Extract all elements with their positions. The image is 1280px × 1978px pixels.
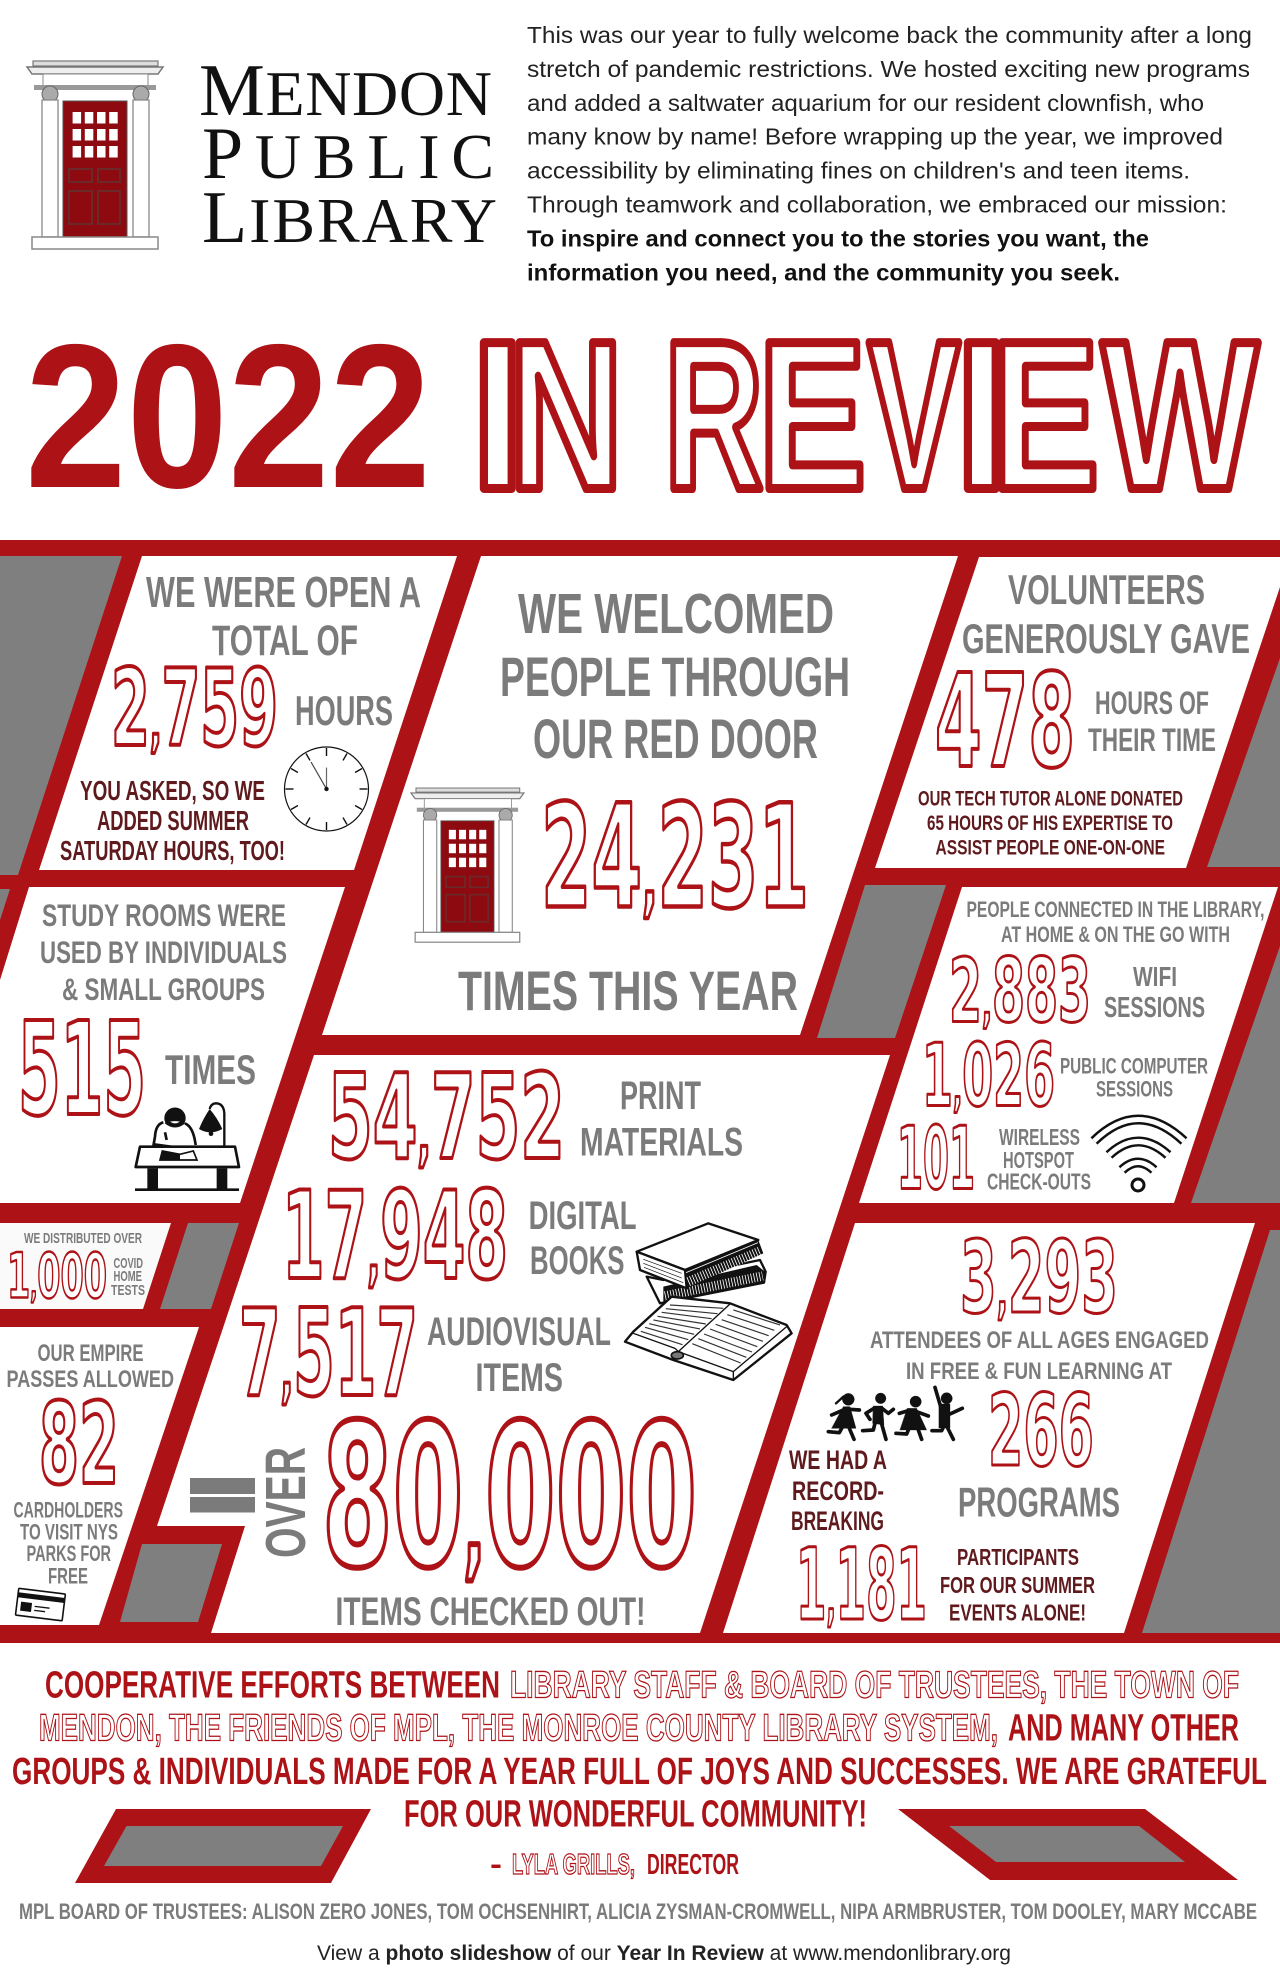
panel: connections: HOTSPOT xyxy=(1003,1147,1074,1173)
intro text block: Through teamwork and collaboration, we embraced our mission: xyxy=(527,192,1227,218)
panel: connections: SESSIONS xyxy=(1096,1076,1173,1102)
signature: LYLA GRILLS, xyxy=(512,1849,635,1881)
panel: study rooms: USED BY INDIVIDUALS xyxy=(40,934,287,970)
panel: connections: CHECK-OUTS xyxy=(987,1168,1091,1194)
panel: items checked out: 7,517 xyxy=(239,1285,418,1424)
intro text block xyxy=(527,22,1252,285)
panel: connections: WIFI xyxy=(1133,961,1177,992)
panel: items checked out: AUDIOVISUAL xyxy=(427,1310,611,1354)
logo wordmark: MENDON xyxy=(199,50,492,132)
intro text block: information you need, and the community you seek. xyxy=(527,259,1120,285)
icon: pass card xyxy=(15,1588,65,1621)
panel: study rooms: 515 xyxy=(18,995,146,1145)
intro text block: accessibility by eliminating fines on children's and teen items. xyxy=(527,158,1190,184)
panel: items checked out: ITEMS CHECKED OUT! xyxy=(336,1590,646,1634)
panel: empire passes xyxy=(0,1327,199,1625)
panel: volunteers: THEIR TIME xyxy=(1088,722,1216,758)
intro text block: and added a saltwater aquarium for our resident clownfish, who xyxy=(527,90,1204,116)
panel: red door visits: WE WELCOMED xyxy=(518,582,834,646)
title: IN REVIEW: R xyxy=(664,296,764,534)
panel: programs: WE HAD A xyxy=(789,1445,887,1475)
panel: connections: 2,883 xyxy=(949,940,1091,1042)
panel: connections: 1,026 xyxy=(922,1026,1055,1126)
panel: programs: RECORD- xyxy=(792,1476,884,1506)
panel: items checked out xyxy=(157,1048,890,1634)
closing statement: FOR OUR WONDERFUL COMMUNITY! xyxy=(404,1794,867,1836)
panel: study rooms: TIMES xyxy=(165,1046,256,1093)
panel: covid tests: COVID xyxy=(114,1255,143,1272)
panel: empire passes: FREE xyxy=(48,1564,88,1589)
panel: open hours xyxy=(39,556,457,870)
logo wordmark: LIBRARY xyxy=(202,177,497,259)
panel: covid tests: 1,000 xyxy=(7,1240,107,1312)
panel: empire passes: CARDHOLDERS xyxy=(14,1498,123,1523)
panel: empire passes: 82 xyxy=(39,1380,119,1510)
panel: open hours: TOTAL OF xyxy=(212,617,358,665)
panel: volunteers: ASSIST PEOPLE ONE-ON-ONE xyxy=(936,836,1165,860)
intro text block: many know by name! Before wrapping up the year, we improved xyxy=(527,124,1223,150)
panel: programs: 3,293 xyxy=(960,1219,1118,1336)
panel: items checked out: MATERIALS xyxy=(580,1120,743,1164)
title: 2022: 2022 xyxy=(25,302,431,531)
icon: red door xyxy=(411,788,524,942)
panel: covid tests: HOME xyxy=(114,1268,142,1285)
panel: open hours: WE WERE OPEN A xyxy=(146,569,421,617)
panel: connections: WIRELESS xyxy=(999,1124,1080,1150)
panel: items checked out: 17,948 xyxy=(282,1166,508,1307)
panel: connections: 101 xyxy=(897,1110,975,1210)
red grid background xyxy=(0,540,1280,1643)
signature: - xyxy=(490,1849,502,1881)
logo wordmark: PUBLIC xyxy=(202,113,494,195)
title: IN REVIEW: I xyxy=(471,296,525,534)
panel: open hours: HOURS xyxy=(295,687,393,734)
panel: study rooms: STUDY ROOMS WERE xyxy=(42,897,286,933)
panel: open hours: ADDED SUMMER xyxy=(97,805,249,836)
icon: equals sign xyxy=(190,1478,255,1512)
panel: open hours: 2,759 xyxy=(111,647,278,770)
panel: volunteers: 65 HOURS OF HIS EXPERTISE TO xyxy=(927,812,1173,835)
icon: wifi xyxy=(1094,1120,1184,1191)
panel: red door visits: OUR RED DOOR xyxy=(533,708,818,770)
title: IN REVIEW: E xyxy=(758,296,866,534)
footer link text: View a photo slideshow of our Year In Review at www.mendonlibrary.org xyxy=(317,1942,1011,1965)
intro text block: This was our year to fully welcome back the community after a long xyxy=(527,22,1252,48)
closing statement xyxy=(12,1665,1267,1836)
panel: programs: PARTICIPANTS xyxy=(957,1544,1079,1570)
panel: open hours: SATURDAY HOURS, TOO! xyxy=(60,835,285,866)
panel: connections xyxy=(859,887,1278,1210)
panel: programs: BREAKING xyxy=(791,1506,884,1536)
panel: connections: PUBLIC COMPUTER xyxy=(1060,1054,1208,1079)
panel: red door visits: PEOPLE THROUGH xyxy=(500,646,850,708)
panel: items checked out: BOOKS xyxy=(530,1239,624,1283)
panel: empire passes: PASSES ALLOWED xyxy=(6,1366,174,1393)
panel: volunteers xyxy=(875,557,1280,868)
panel: empire passes: PARKS FOR xyxy=(26,1541,111,1566)
closing statement: COOPERATIVE EFFORTS BETWEEN xyxy=(45,1665,500,1707)
panel: covid tests: WE DISTRIBUTED OVER xyxy=(24,1230,142,1247)
decorative parallelogram left xyxy=(75,1809,371,1883)
panel: programs: IN FREE & FUN LEARNING AT xyxy=(906,1358,1172,1385)
panel: study rooms: & SMALL GROUPS xyxy=(62,971,265,1007)
panel: volunteers: 478 xyxy=(935,647,1075,797)
panel: red door visits xyxy=(322,556,958,1035)
icon: stack of books xyxy=(625,1223,792,1380)
icon: running children xyxy=(828,1387,962,1439)
panel: programs: EVENTS ALONE! xyxy=(949,1600,1086,1626)
intro text block: To inspire and connect you to the stories you want, the xyxy=(527,225,1149,251)
icon: clock xyxy=(284,747,368,831)
intro text block: stretch of pandemic restrictions. We hosted exciting new programs xyxy=(527,56,1250,82)
panel: programs: 1,181 xyxy=(796,1528,927,1643)
panel: programs: PROGRAMS xyxy=(958,1478,1120,1526)
icon: person studying at desk xyxy=(135,1103,239,1190)
signature: DIRECTOR xyxy=(647,1849,739,1881)
panel: programs xyxy=(723,1219,1255,1643)
panel: programs: 266 xyxy=(988,1374,1094,1489)
gray accent blocks xyxy=(0,556,1280,1633)
panel: items checked out: ITEMS xyxy=(476,1356,563,1400)
rotated label: over: OVER xyxy=(254,1447,318,1558)
title: IN REVIEW: I xyxy=(955,296,1009,534)
panel: open hours: YOU ASKED, SO WE xyxy=(80,775,265,806)
decorative parallelogram right xyxy=(898,1809,1238,1880)
title: IN REVIEW: E xyxy=(991,296,1099,534)
logo wordmark xyxy=(199,50,497,259)
panel: covid tests: TESTS xyxy=(111,1282,145,1299)
panel: items checked out: PRINT xyxy=(620,1074,701,1118)
panel: empire passes: OUR EMPIRE xyxy=(38,1340,144,1367)
panel: connections: SESSIONS xyxy=(1104,992,1205,1024)
icon: library door logo xyxy=(27,61,163,249)
title: IN REVIEW: N xyxy=(508,296,624,534)
panel: red door visits: TIMES THIS YEAR xyxy=(458,960,798,1022)
panel: items checked out: 80,000 xyxy=(322,1383,697,1612)
panel: volunteers: HOURS OF xyxy=(1095,685,1209,721)
panel: programs: FOR OUR SUMMER xyxy=(940,1572,1095,1598)
title: IN REVIEW: V xyxy=(868,296,960,534)
panel: red door visits: 24,231 xyxy=(541,774,809,940)
panel: items checked out: DIGITAL xyxy=(529,1194,637,1238)
panel: items checked out: 54,752 xyxy=(328,1048,565,1186)
panel: study rooms xyxy=(0,887,345,1203)
panel: empire passes: TO VISIT NYS xyxy=(20,1519,118,1544)
